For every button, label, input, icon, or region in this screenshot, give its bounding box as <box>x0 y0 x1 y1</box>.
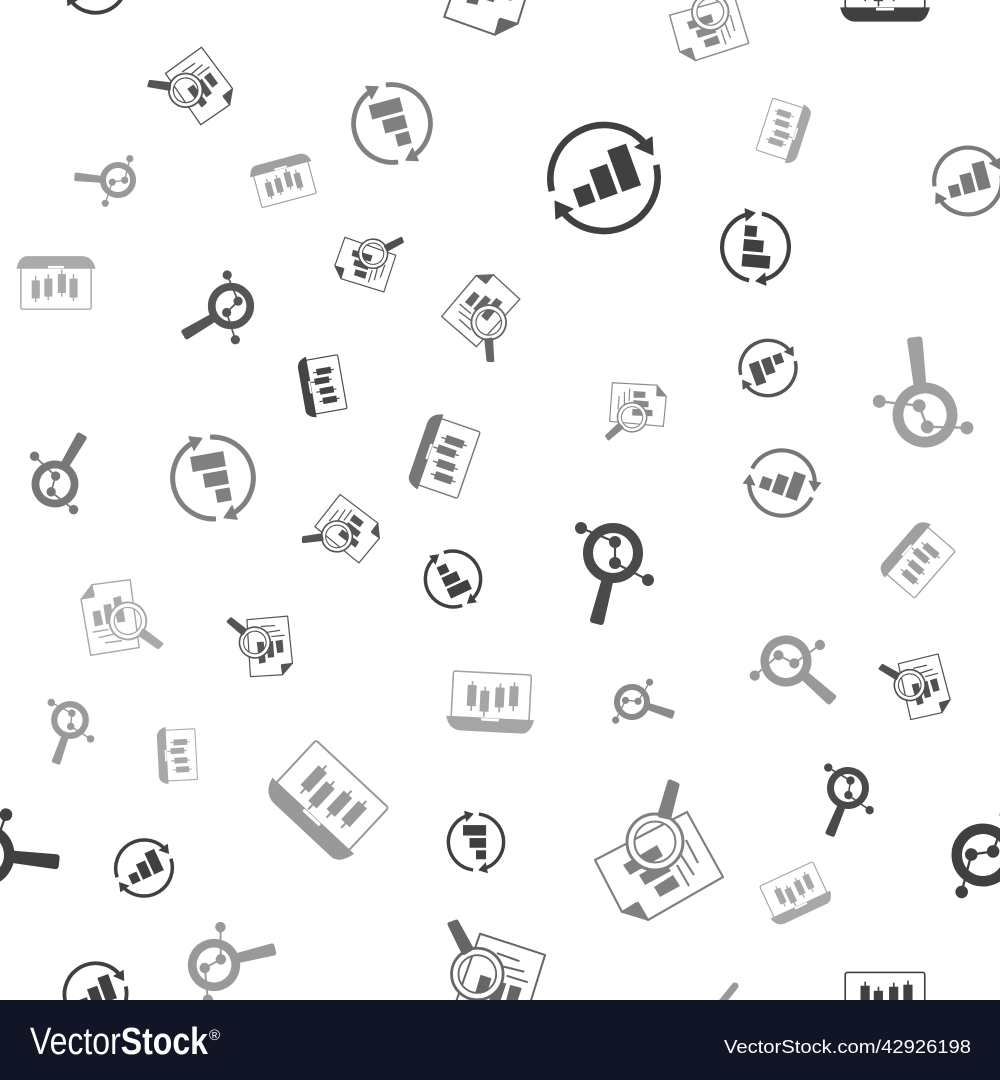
icon: laptop chart right <box>876 517 958 601</box>
icon: laptop chart lower left <box>156 725 198 785</box>
icon: laptop chart center <box>406 410 482 503</box>
icon: magnifier nodes bottom <box>173 905 283 1007</box>
icon: document magnifier top <box>662 0 762 71</box>
icon: laptop chart inverted left <box>16 256 96 309</box>
icon: cycle bars lower center <box>448 811 504 873</box>
icon: magnifier nodes right edge <box>945 802 1000 899</box>
icon: cycle bars bottom <box>53 953 138 1035</box>
icon: magnifier handle cut off <box>722 986 735 1002</box>
icon: magnifier nodes left edge <box>0 802 60 899</box>
icon: cycle bars tilted <box>730 331 806 405</box>
icon: cycle bars lower left <box>104 829 184 907</box>
icon: laptop chart upright <box>445 671 536 734</box>
icon: magnifier nodes upper left <box>173 268 270 366</box>
icon: magnifier nodes small left <box>42 698 97 766</box>
icon: magnifier nodes small gray <box>74 155 140 211</box>
footer bar <box>0 1000 1000 1080</box>
icon: document magnifier mid <box>292 485 389 580</box>
icon: cycle bars right edge <box>923 139 1000 223</box>
icon: magnifier nodes small dark <box>815 763 879 840</box>
footer id: VectorStock.com/42926198 <box>724 1037 971 1057</box>
icon: document magnifier light <box>64 566 179 677</box>
icon: laptop chart upper right <box>755 95 813 166</box>
footer logo: VectorStock <box>30 1021 209 1063</box>
icon: document magnifier gray <box>585 364 680 460</box>
icon: cycle bars top edge <box>53 0 138 23</box>
icon: magnifier nodes right large <box>857 331 975 462</box>
icon: laptop chart large <box>260 736 393 867</box>
icon: cycle bars large <box>530 108 678 248</box>
icon: document magnifier lower left <box>211 595 309 690</box>
icon: document magnifier tilted <box>433 264 536 372</box>
icon: document magnifier bottom <box>399 891 572 1064</box>
icon: magnifier nodes large dark <box>575 522 654 622</box>
icon: document magnifier lower right <box>869 640 961 728</box>
icon: document magnifier large <box>595 782 723 920</box>
icon: magnifier nodes lower right <box>748 618 854 716</box>
icon: cycle bars left gray <box>165 427 261 529</box>
icon: magnifier nodes left <box>18 423 98 515</box>
icon: laptop chart top edge <box>840 0 930 22</box>
icon: cycle bars center <box>415 539 491 619</box>
icon: cycle bars dark <box>719 207 792 287</box>
icon: laptop chart lower right <box>756 860 835 928</box>
registered mark: ® <box>209 1027 220 1044</box>
icon: cycle bars gray <box>737 440 827 526</box>
icon: cycle bars <box>344 72 440 175</box>
icon: laptop chart dark <box>296 351 348 419</box>
icon: magnifier nodes small center <box>612 676 675 728</box>
icon: document magnifier center <box>322 210 420 307</box>
icon: laptop chart inverted small <box>248 151 320 209</box>
icon: document magnifier top edge <box>395 0 568 57</box>
icon: laptop chart bottom <box>840 972 930 1033</box>
icon: document magnifier upper left <box>145 44 236 130</box>
